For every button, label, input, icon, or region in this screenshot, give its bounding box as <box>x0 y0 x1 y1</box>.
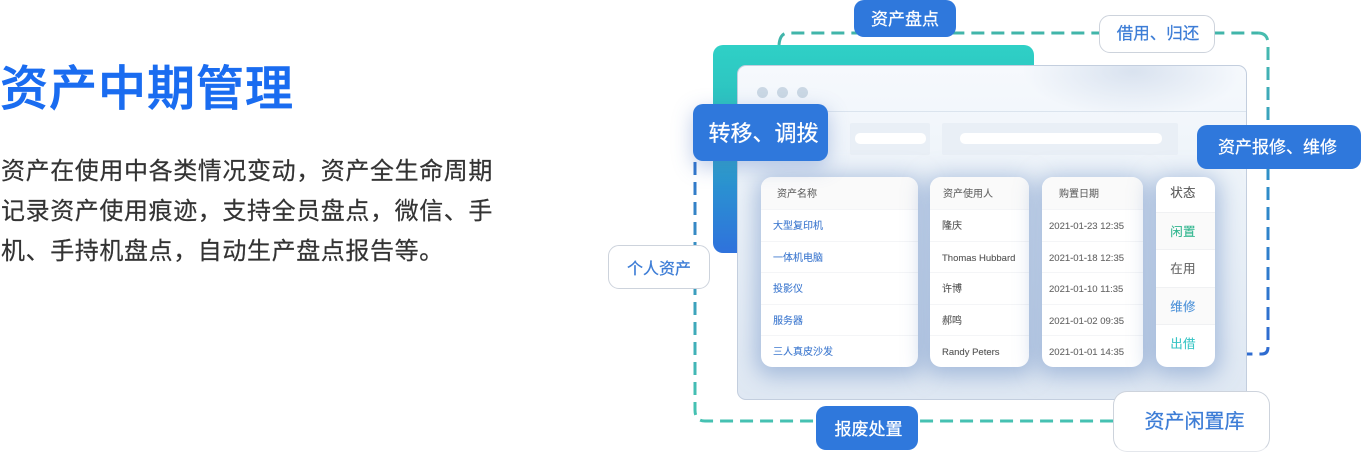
table column: purchase date: 2021-01-18 12:35 <box>1049 253 1124 264</box>
table column: asset name: 资产名称 <box>777 189 817 200</box>
text block: description: 记录资产使用痕迹，支持全员盘点，微信、手 <box>1 198 493 225</box>
badge: idle asset warehouse <box>1113 391 1270 452</box>
dashed lifecycle loop <box>694 32 1270 422</box>
text block: description: 机、手持机盘点，自动生产盘点报告等。 <box>1 238 444 265</box>
table column: asset name: 一体机电脑 <box>773 253 823 264</box>
window control dots <box>757 87 808 98</box>
table column: asset user: 郝鸣 <box>942 316 962 327</box>
table column: asset name <box>761 177 918 367</box>
badge: borrow and return: 借用、归还 <box>1117 25 1199 43</box>
badge: asset inventory: 资产盘点 <box>871 10 939 28</box>
text block: description <box>1 158 493 265</box>
badge: asset inventory <box>854 0 956 37</box>
badge: repair and maintenance <box>1197 125 1361 169</box>
table column: asset name: 投影仪 <box>773 284 803 295</box>
table column: status: 状态 <box>1170 186 1196 200</box>
table column: asset name: 三人真皮沙发 <box>773 347 833 358</box>
badge: transfer and allocate: 转移、调拨 <box>708 120 818 146</box>
search field 2 <box>942 123 1178 155</box>
table column: asset user: 隆庆 <box>942 221 962 232</box>
table column: status: 在用 <box>1170 262 1196 276</box>
table column: status: 闲置 <box>1170 225 1196 239</box>
table column: asset user: Randy Peters <box>942 347 1000 358</box>
badge: personal assets: 个人资产 <box>627 261 691 278</box>
table column: purchase date <box>1042 177 1143 367</box>
title: 资产中期管理 <box>0 63 294 116</box>
table column: purchase date: 2021-01-01 14:35 <box>1049 347 1124 358</box>
text block: description: 资产在使用中各类情况变动，资产全生命周期 <box>1 158 493 185</box>
table column: status: 维修 <box>1170 300 1196 314</box>
table column: asset name: 大型复印机 <box>773 221 823 232</box>
table column: purchase date: 2021-01-02 09:35 <box>1049 316 1124 327</box>
badge: borrow and return <box>1099 15 1215 53</box>
badge: personal assets <box>608 245 710 289</box>
table column: purchase date: 2021-01-23 12:35 <box>1049 221 1124 232</box>
table column: asset user: 许博 <box>942 284 962 295</box>
badge: idle asset warehouse: 资产闲置库 <box>1144 410 1244 432</box>
table column: asset user <box>930 177 1029 367</box>
table column: asset name: 服务器 <box>773 316 803 327</box>
badge: repair and maintenance: 资产报修、维修 <box>1218 138 1337 156</box>
table column: purchase date: 2021-01-10 11:35 <box>1049 284 1123 295</box>
table column: asset user: Thomas Hubbard <box>942 253 1015 264</box>
table column: status <box>1156 177 1215 367</box>
table column: purchase date: 购置日期 <box>1059 189 1099 200</box>
search field 1 <box>850 123 930 155</box>
badge: transfer and allocate <box>693 104 828 161</box>
badge: scrap disposal: 报废处置 <box>834 420 902 439</box>
table column: asset user: 资产使用人 <box>943 189 993 200</box>
asset table window <box>737 65 1247 400</box>
teal backing panel <box>713 45 1034 253</box>
badge: scrap disposal <box>816 406 918 450</box>
table column: status: 出借 <box>1170 337 1196 351</box>
